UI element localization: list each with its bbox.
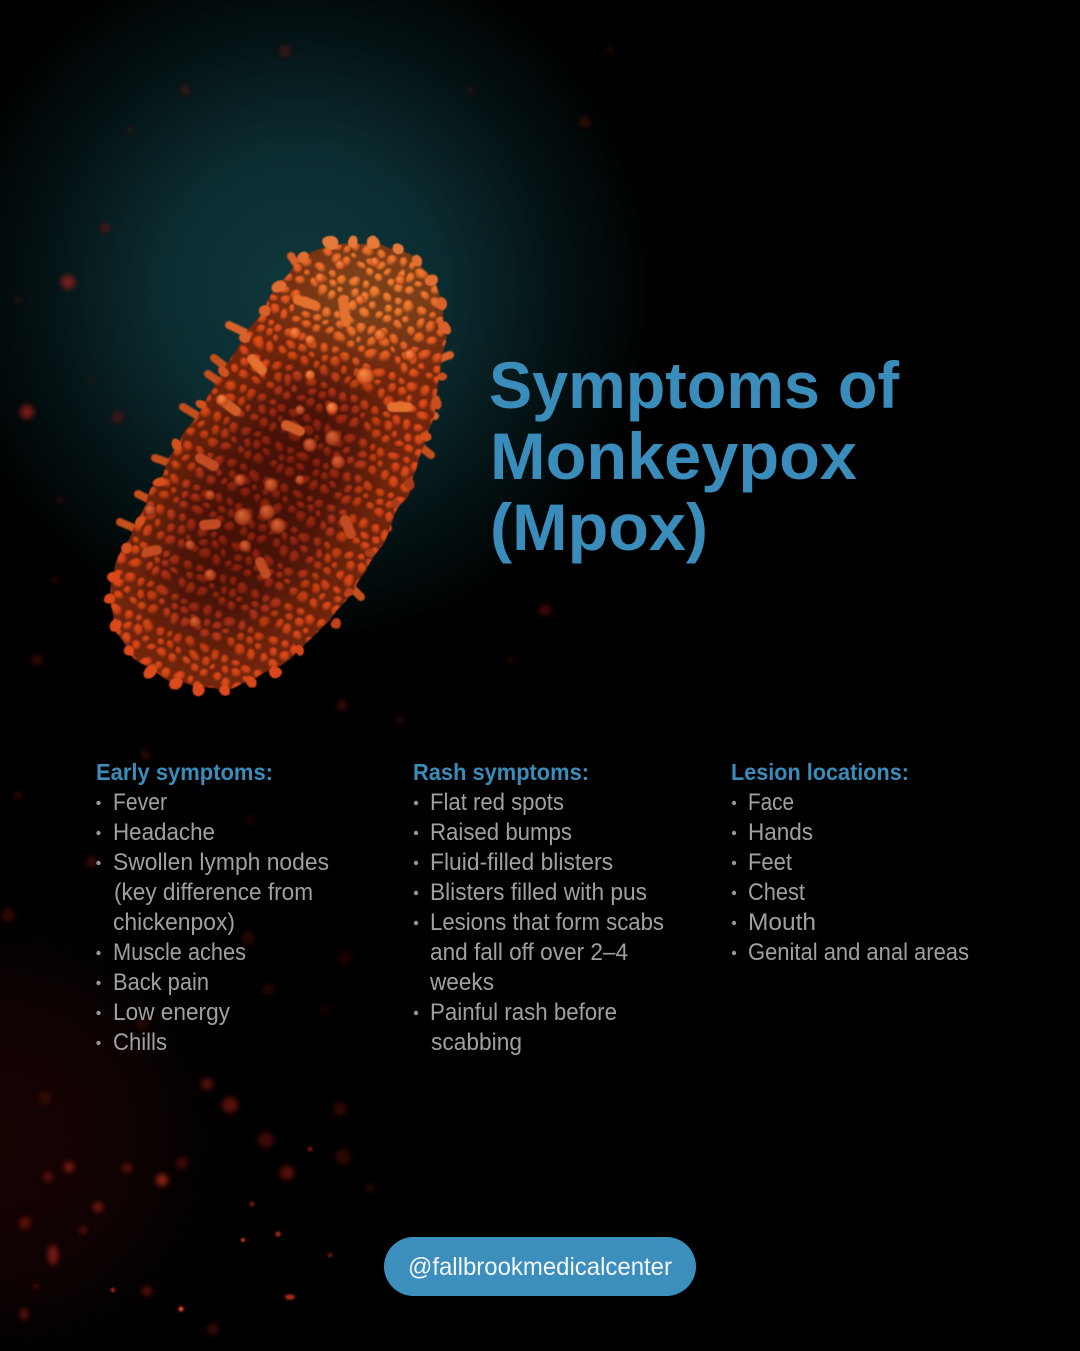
heading: lesion locations: Lesion locations: — [731, 759, 909, 785]
column: rash symptoms — [413, 759, 664, 1056]
list: early symptoms: (key difference from — [114, 879, 313, 906]
list: early symptoms: Headache — [113, 819, 215, 846]
list: early symptoms — [113, 789, 329, 1056]
list: rash symptoms: weeks — [429, 969, 494, 996]
column: early symptoms — [96, 759, 329, 1056]
list: rash symptoms: Lesions that form scabs — [430, 909, 664, 936]
list: rash symptoms: Blisters filled with pus — [430, 879, 647, 906]
list: early symptoms: Low energy — [113, 999, 230, 1026]
virus prominent lobes — [144, 257, 416, 628]
list: rash symptoms — [429, 789, 664, 1056]
list: lesion locations: Hands — [748, 819, 813, 846]
virus particle illustration — [103, 234, 455, 698]
bullets: lesion locations — [732, 801, 736, 955]
list: lesion locations: Mouth — [748, 909, 816, 936]
title — [489, 348, 900, 564]
list: early symptoms: Fever — [113, 789, 167, 816]
bullets: early symptoms — [96, 801, 101, 1045]
bullets: rash symptoms — [414, 801, 418, 1015]
list: rash symptoms: Flat red spots — [430, 789, 564, 816]
list: lesion locations: Feet — [748, 849, 792, 876]
list: rash symptoms: scabbing — [431, 1029, 522, 1056]
virus surface stalks — [120, 256, 450, 597]
list: rash symptoms: Fluid-filled blisters — [430, 849, 613, 876]
small bright particles — [111, 1146, 333, 1311]
soft red particles — [1, 45, 614, 1335]
list: lesion locations: Chest — [748, 879, 805, 906]
title: Monkeypox — [490, 419, 857, 493]
list: rash symptoms: Raised bumps — [430, 819, 572, 846]
title: Symptoms of — [489, 348, 900, 422]
list: early symptoms: Chills — [113, 1029, 167, 1056]
list: rash symptoms: Painful rash before — [430, 999, 617, 1026]
heading: early symptoms: Early symptoms: — [96, 759, 273, 785]
list: rash symptoms: and fall off over 2–4 — [430, 939, 628, 966]
list: early symptoms: Back pain — [113, 969, 209, 996]
list: early symptoms: Muscle aches — [113, 939, 246, 966]
list: lesion locations: Genital and anal areas — [748, 939, 969, 966]
list: lesion locations — [748, 789, 969, 966]
list: early symptoms: chickenpox) — [113, 909, 235, 936]
handle pill: @fallbrookmedicalcenter — [408, 1253, 672, 1281]
list: early symptoms: Swollen lymph nodes — [113, 849, 329, 876]
heading: rash symptoms: Rash symptoms: — [413, 759, 589, 785]
virus edge bumps — [104, 235, 450, 696]
title: (Mpox) — [490, 490, 708, 564]
column: lesion locations — [731, 759, 969, 966]
handle pill — [384, 1237, 696, 1296]
list: lesion locations: Face — [748, 789, 794, 816]
virus body — [103, 234, 452, 698]
